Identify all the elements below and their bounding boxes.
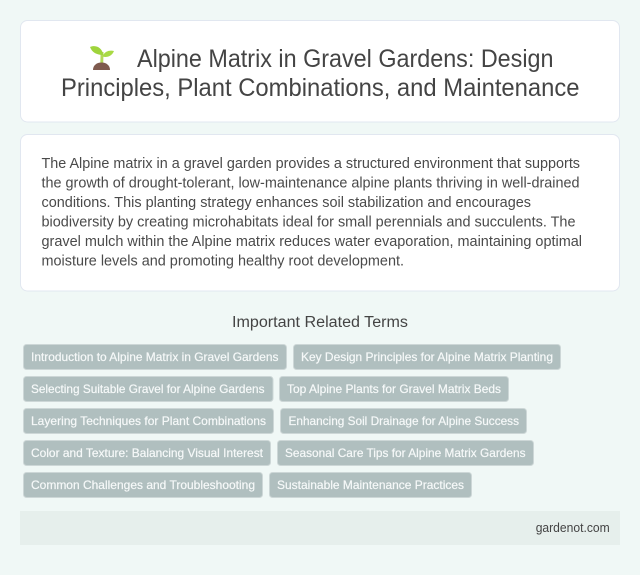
description text: gravel mulch within the Alpine matrix reduces water evaporation, maintaining optimal — [42, 234, 582, 250]
panel: description card — [20, 134, 620, 291]
footer — [20, 511, 620, 545]
description text: the growth of drought-tolerant, low-maintenance alpine plants thriving in well-drained — [42, 176, 580, 192]
chip: Top Alpine Plants for Gravel Matrix Beds — [287, 382, 501, 396]
chip — [270, 472, 472, 498]
panel: related term chips — [24, 344, 560, 498]
chip — [294, 344, 560, 370]
chip — [280, 376, 508, 402]
chip: Sustainable Maintenance Practices — [277, 478, 464, 492]
footer source text: gardenot.com — [536, 521, 610, 535]
description text: moisture levels and promoting healthy root development. — [42, 254, 404, 270]
description text: conditions. This planting strategy enhances soil stabilization and encourages — [42, 195, 531, 211]
chip: Enhancing Soil Drainage for Alpine Success — [288, 414, 519, 428]
chip: Selecting Suitable Gravel for Alpine Gardens — [31, 382, 264, 396]
chip: Color and Texture: Balancing Visual Interest — [31, 446, 264, 460]
chip: Introduction to Alpine Matrix in Gravel Gardens — [31, 350, 278, 364]
chip: Common Challenges and Troubleshooting — [31, 478, 255, 492]
chip — [24, 376, 273, 402]
chip — [24, 440, 270, 466]
title line 2: Principles, Plant Combinations, and Maintenance — [61, 74, 580, 102]
chip: Layering Techniques for Plant Combinations — [31, 414, 266, 428]
chip — [24, 344, 286, 370]
chip — [24, 472, 262, 498]
description text — [42, 156, 582, 270]
chip: Key Design Principles for Alpine Matrix Planting — [301, 350, 553, 364]
chip — [278, 440, 534, 466]
chip: Seasonal Care Tips for Alpine Matrix Gardens — [285, 446, 526, 460]
description text: The Alpine matrix in a gravel garden provides a structured environment that supports — [42, 156, 580, 172]
heading: important related terms: Important Related Terms — [232, 314, 408, 331]
panel: title card — [20, 20, 620, 122]
chip — [24, 408, 274, 434]
chip — [280, 408, 526, 434]
description text: biodiversity by creating microhabitats ideal for small perennials and succulents. The — [42, 215, 576, 231]
icon: sprout — [90, 46, 114, 70]
title line 1: Alpine Matrix in Gravel Gardens: Design — [137, 45, 554, 73]
